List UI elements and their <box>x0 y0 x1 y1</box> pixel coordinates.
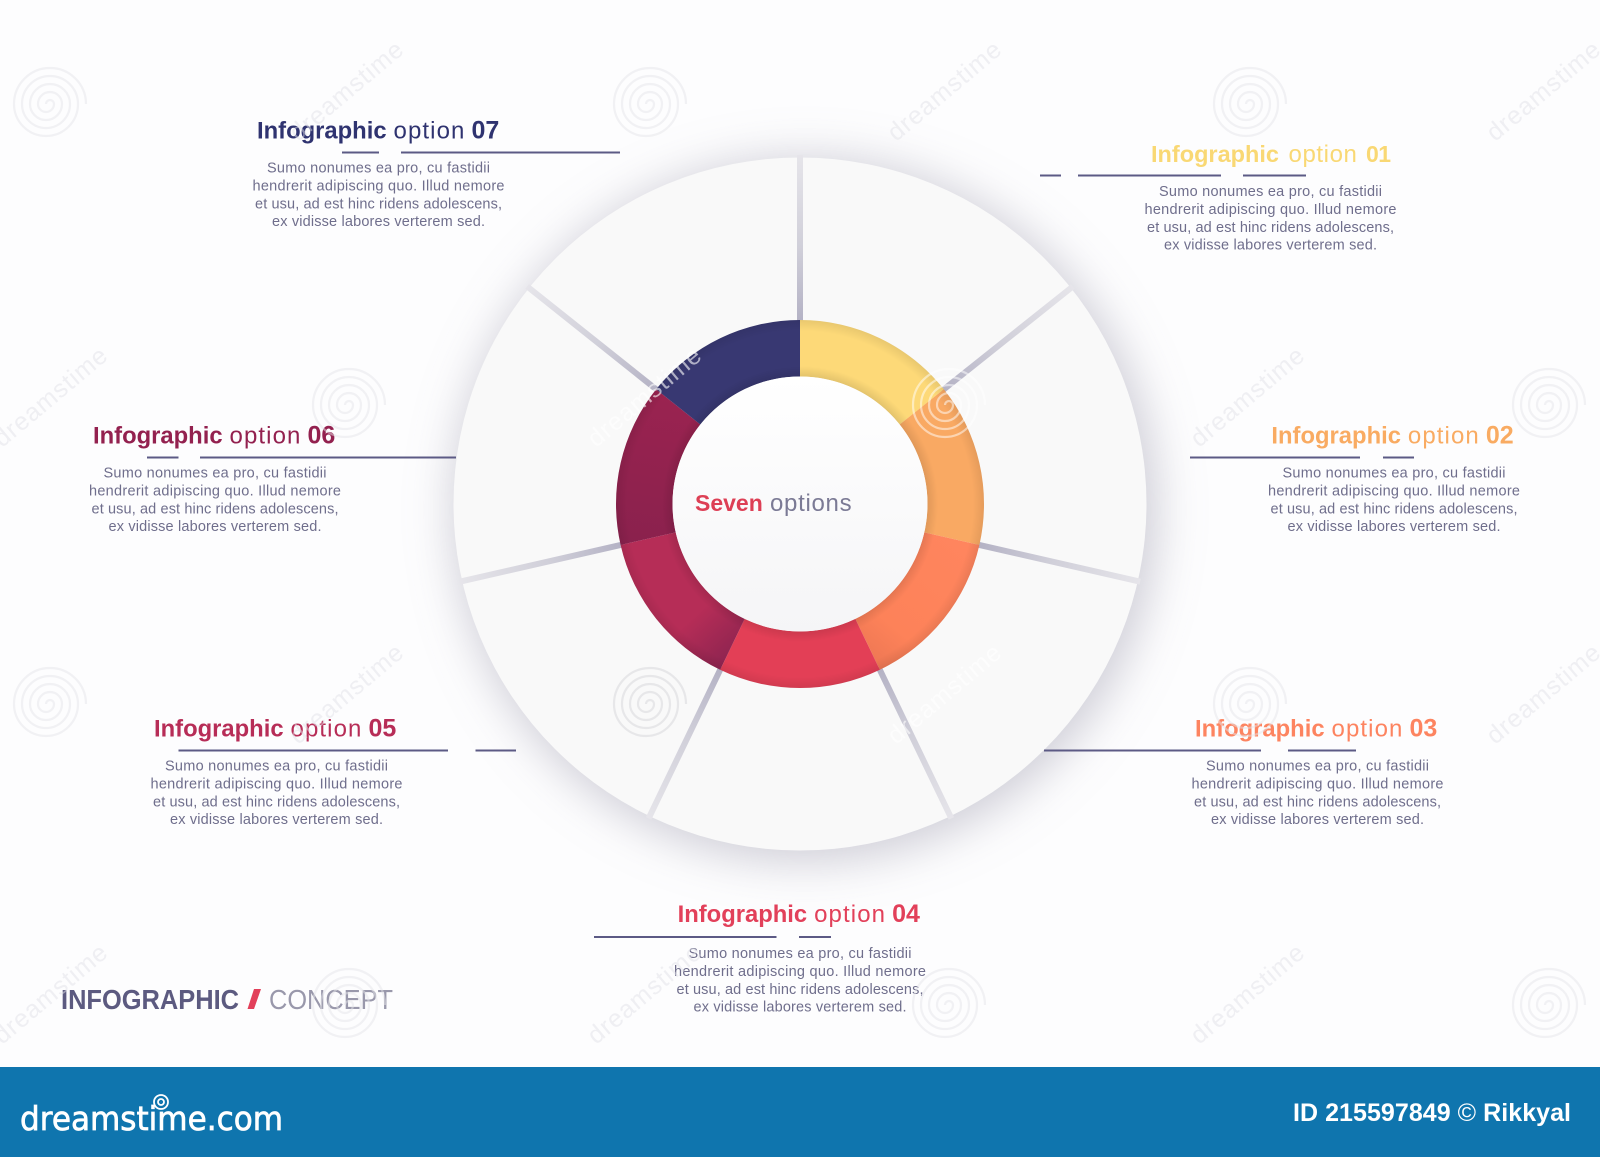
watermark pattern: dreamstime <box>1185 341 1311 453</box>
option 06 title: Infographic <box>93 422 223 450</box>
ring segment 06: plum <box>616 389 700 545</box>
option 03 title: option <box>1332 716 1404 742</box>
option 05 rule <box>178 750 516 752</box>
option 04 title: 04 <box>892 900 920 928</box>
watermark pattern: dreamstime <box>882 638 1008 750</box>
option 06 body: ex vidisse labores verterem sed. <box>108 519 322 535</box>
option 06 body: hendrerit adipiscing quo. Illud nemore <box>89 484 341 500</box>
option 07 body: Sumo nonumes ea pro, cu fastidii <box>267 160 490 176</box>
option 02 title: 02 <box>1486 422 1514 450</box>
concept label: CONCEPT <box>269 984 393 1015</box>
option 06 body <box>89 466 341 535</box>
ring segment 03: coral <box>855 532 979 670</box>
option 05 title: 05 <box>368 714 396 742</box>
option 02 body: Sumo nonumes ea pro, cu fastidii <box>1282 466 1506 482</box>
option 01 body: Sumo nonumes ea pro, cu fastidii <box>1159 184 1382 200</box>
footer band <box>0 1067 1600 1157</box>
option 01 body <box>1144 184 1396 254</box>
option 05 body: ex vidisse labores verterem sed. <box>170 812 383 828</box>
option 07 body: hendrerit adipiscing quo. Illud nemore <box>252 178 504 194</box>
option 03 title: Infographic <box>1195 716 1325 742</box>
option 05 body: Sumo nonumes ea pro, cu fastidii <box>165 758 388 774</box>
centre label: Seven <box>695 490 763 516</box>
option 04 body <box>674 946 926 1016</box>
option 03 block <box>1044 714 1444 828</box>
icon: logo spiral <box>154 1095 168 1109</box>
option 01 body: ex vidisse labores verterem sed. <box>1164 238 1377 254</box>
centre label: options <box>770 490 852 517</box>
option 03 body: ex vidisse labores verterem sed. <box>1211 812 1424 828</box>
option 06 title: option <box>230 422 302 450</box>
option 06 rule <box>147 456 456 458</box>
ring tube shading <box>644 348 956 660</box>
option 05 body: et usu, ad est hinc ridens adolescens, <box>153 794 400 810</box>
option 07 title: Infographic <box>257 118 387 144</box>
concept label <box>61 984 393 1015</box>
panel: seven-segment disc <box>454 155 1146 850</box>
option 02 title: option <box>1408 422 1480 450</box>
disc shadow <box>453 158 1157 862</box>
option 07 title: 07 <box>472 116 499 144</box>
option 04 body: Sumo nonumes ea pro, cu fastidii <box>688 946 912 962</box>
watermark pattern: dreamstime <box>582 341 708 453</box>
option 05 title: option <box>290 716 362 742</box>
option 03 title: 03 <box>1410 714 1437 742</box>
option 02 body: et usu, ad est hinc ridens adolescens, <box>1270 502 1518 518</box>
watermark pattern: dreamstime <box>582 938 708 1050</box>
option 04 title: Infographic <box>678 901 807 928</box>
option 04 rule <box>594 936 831 938</box>
icon: red slash <box>248 989 261 1009</box>
option 02 body <box>1268 466 1520 535</box>
concept label: INFOGRAPHIC <box>61 984 239 1015</box>
option 06 body: Sumo nonumes ea pro, cu fastidii <box>104 466 326 482</box>
option 05 block <box>150 714 516 828</box>
option 01 title: Infographic <box>1151 141 1279 167</box>
ring segment 05: crimson <box>621 532 745 670</box>
watermark pattern: dreamstime <box>1185 938 1311 1050</box>
option 07 title: option <box>394 118 466 144</box>
option 01 block <box>1040 141 1396 254</box>
option 07 body: et usu, ad est hinc ridens adolescens, <box>255 196 502 212</box>
option 06 title: 06 <box>308 422 335 450</box>
watermark pattern: dreamstime <box>284 638 410 750</box>
option 03 body <box>1192 758 1444 828</box>
option 07 body <box>252 160 504 230</box>
option 06 body: et usu, ad est hinc ridens adolescens, <box>92 502 338 518</box>
logo text: dreamstime.com <box>20 1099 283 1138</box>
option 02 title: Infographic <box>1271 422 1401 450</box>
option 04 body: et usu, ad est hinc ridens adolescens, <box>676 982 924 998</box>
ring segment 07: navy <box>656 320 800 424</box>
option 06 block <box>89 422 456 535</box>
ring segment 02: orange <box>900 389 984 545</box>
option 05 body: hendrerit adipiscing quo. Illud nemore <box>150 776 402 792</box>
option 01 body: hendrerit adipiscing quo. Illud nemore <box>1144 202 1396 218</box>
option 04 body: hendrerit adipiscing quo. Illud nemore <box>674 964 926 980</box>
image id and credit: ID 215597849 © Rikkyal <box>1293 1099 1571 1127</box>
watermark pattern: dreamstime <box>882 35 1008 147</box>
donut ring <box>616 320 984 688</box>
option 03 rule <box>1044 750 1356 752</box>
watermark pattern: dreamstime <box>284 35 410 147</box>
option 03 body: hendrerit adipiscing quo. Illud nemore <box>1192 776 1444 792</box>
option 04 body: ex vidisse labores verterem sed. <box>694 1000 906 1016</box>
option 03 body: Sumo nonumes ea pro, cu fastidii <box>1206 758 1429 774</box>
option 02 rule <box>1190 456 1414 458</box>
option 07 body: ex vidisse labores verterem sed. <box>272 214 485 230</box>
option 07 block <box>252 116 620 230</box>
ring segment 01: yellow <box>800 320 944 424</box>
option 05 body <box>150 758 402 828</box>
option 02 body: ex vidisse labores verterem sed. <box>1288 519 1500 535</box>
option 04 block <box>594 900 926 1016</box>
option 01 rule <box>1040 174 1306 176</box>
ring segment 04: red <box>720 619 880 688</box>
option 02 body: hendrerit adipiscing quo. Illud nemore <box>1268 484 1520 500</box>
option 01 title: option <box>1288 141 1358 168</box>
option 04 title: option <box>814 901 886 928</box>
option 01 body: et usu, ad est hinc ridens adolescens, <box>1147 220 1394 236</box>
centre circle <box>672 376 928 632</box>
option 03 body: et usu, ad est hinc ridens adolescens, <box>1194 794 1441 810</box>
option 02 block <box>1190 422 1520 535</box>
option 05 title: Infographic <box>154 716 284 742</box>
option 01 title: 01 <box>1366 141 1391 167</box>
option 07 rule <box>342 152 620 154</box>
